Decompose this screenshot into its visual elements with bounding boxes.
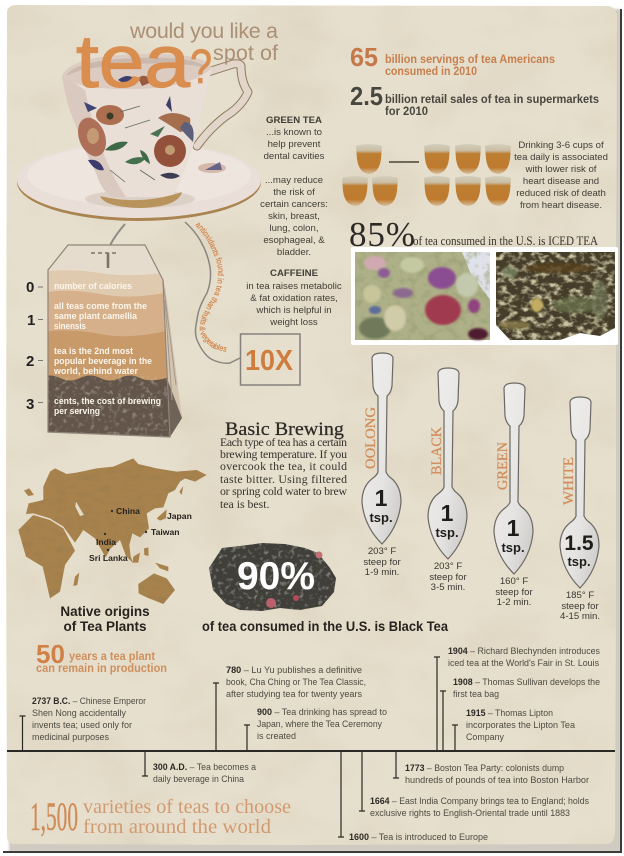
photo: floral tea <box>355 252 490 340</box>
photos: loose tea leaves <box>351 247 618 345</box>
tea bag scale and facts: per serving <box>54 406 100 417</box>
basic brewing <box>220 419 347 511</box>
event: 780: after studying tea for twenty years <box>226 689 362 700</box>
basic brewing: or spring cold water to brew <box>220 484 347 498</box>
map caption <box>60 604 150 634</box>
10X callout <box>240 334 300 385</box>
event: 1908: 1908 – Thomas Sullivan develops the <box>453 677 600 688</box>
basic brewing: tea is best. <box>220 497 270 511</box>
event: 1908: first tea bag <box>453 689 499 700</box>
heart health text: Drinking 3-6 cups of <box>518 140 604 151</box>
spoon: black: tsp. <box>435 525 459 540</box>
green tea and caffeine facts: lung, colon, <box>269 223 319 234</box>
stat: 2.5 billion retail sales: for 2010 <box>385 106 428 118</box>
heart health text <box>514 140 608 211</box>
event: 780 <box>213 665 366 750</box>
timeline axis <box>7 750 615 752</box>
event: 2737 B.C. <box>20 696 147 750</box>
green tea and caffeine facts: weight loss <box>269 317 318 328</box>
antioxidants string with curved text: antioxidants found in tea than fruits & vegetables <box>196 222 227 352</box>
map caption: Native origins <box>60 604 150 619</box>
timeline <box>7 646 615 843</box>
map labels: Sri Lanka <box>89 553 128 563</box>
stat: 50 years: years a tea plant <box>69 651 155 663</box>
10X callout: 10X <box>245 345 294 377</box>
spoon: green: tsp. <box>501 540 525 555</box>
spoon: oolong <box>362 353 401 578</box>
spoon: oolong: 1 <box>375 485 388 511</box>
green tea and caffeine facts: CAFFEINE <box>270 268 319 279</box>
stat: 1,500 varieties: varieties of teas to choose <box>83 796 291 818</box>
tea bag scale and facts: 2 <box>26 353 34 370</box>
spoon: oolong: steep for <box>363 557 401 568</box>
green tea and caffeine facts: bladder. <box>277 247 311 258</box>
spoon: white: 1.5 <box>564 532 594 555</box>
title: ? <box>190 41 212 94</box>
cup foot <box>100 192 182 208</box>
tea bag scale and facts: same plant camellia <box>54 311 138 322</box>
stat: 50 years: 50 <box>36 639 65 669</box>
spoon: white: tsp. <box>567 554 591 569</box>
cup body <box>62 68 212 197</box>
green tea and caffeine facts: & fat oxidation rates, <box>250 293 338 304</box>
event: 780: book, Cha Ching or The Tea Classic, <box>226 677 366 688</box>
spoon: green <box>494 383 533 608</box>
spoon: white: WHITE <box>561 457 577 505</box>
stat: 85% iced tea: 85% <box>349 215 415 254</box>
floral decoration <box>73 76 194 182</box>
stat: 1,500 varieties: from around the world <box>83 816 271 838</box>
green tea and caffeine facts: ...may reduce <box>265 175 323 186</box>
event: 1915: incorporates the Lipton Tea <box>466 720 576 731</box>
tea bag scale and facts: world, behind water <box>53 366 138 377</box>
map labels: China <box>116 506 140 516</box>
spoon: black: 3-5 min. <box>431 582 465 593</box>
90% black tea stat: of tea consumed in the U.S. is Black Tea <box>202 619 448 634</box>
spoon: black: steep for <box>429 572 467 583</box>
stat: 2.5 billion retail sales <box>350 81 599 118</box>
green tea and caffeine facts: in tea raises metabolic <box>246 281 342 292</box>
tea bag scale and facts: all teas come from the <box>54 301 147 312</box>
event: 1664: 1664 – East India Company brings tea to England; holds <box>370 796 589 807</box>
spoon: white: steep for <box>561 601 599 612</box>
tea bag string <box>108 224 125 255</box>
event: 900: Japan, where the Tea Ceremony <box>257 719 382 730</box>
tea bag scale and facts <box>26 279 161 417</box>
event: 2737 B.C.: invents tea; used only for <box>32 720 133 731</box>
event: 1915: 1915 – Thomas Lipton <box>466 708 553 719</box>
title: would you like a <box>129 19 278 43</box>
spoon: white: 185° F <box>566 590 594 601</box>
basic brewing: brewing temperature. If you <box>220 447 347 461</box>
stat: 2.5 billion retail sales: billion retail sales of tea in supermarkets <box>385 94 599 106</box>
stat: 65 billion servings: billion servings of tea Americans <box>385 54 555 66</box>
heart health text: tea daily is associated <box>514 152 608 163</box>
green tea and caffeine facts: which is helpful in <box>255 305 332 316</box>
green tea and caffeine facts: dental cavities <box>264 151 325 162</box>
title: spot of <box>213 41 278 65</box>
spoon: oolong: 203° F <box>368 546 396 557</box>
spoon: green: 1 <box>507 515 520 541</box>
teacup on saucer <box>17 54 261 221</box>
spoon: black: BLACK <box>429 427 445 475</box>
saucer <box>17 142 261 221</box>
event: 780: 780 – Lu Yu publishes a definitive <box>226 665 362 676</box>
event: 2737 B.C.: Shen Nong accidentally <box>32 708 126 719</box>
event: 2737 B.C.: 2737 B.C. – Chinese Emperor <box>32 696 147 707</box>
tea bag scale and facts: 0 <box>26 279 34 296</box>
heart health text: heart disease and <box>523 176 599 187</box>
green tea and caffeine facts: ...is known to <box>266 127 322 138</box>
spoon: oolong: OOLONG <box>363 407 379 469</box>
heart health text: reduced risk of death <box>516 188 606 199</box>
tea bag scale and facts: tea is the 2nd most <box>54 346 134 357</box>
stat: 65 billion servings <box>350 42 555 78</box>
spoon: black: 1 <box>441 500 454 526</box>
event: 1600: 1600 – Tea is introduced to Europe <box>349 832 488 843</box>
stat: 50 years: can remain in production <box>36 663 167 675</box>
title: tea <box>76 20 191 103</box>
spoon: green: 1-2 min. <box>497 597 531 608</box>
stat: 85% iced tea <box>349 215 598 254</box>
map labels: Taiwan <box>151 527 180 537</box>
event: 1600 <box>338 752 488 843</box>
tea bag scale and facts: popular beverage in the <box>54 356 152 367</box>
stat: 65 billion servings: consumed in 2010 <box>385 66 477 78</box>
tea bag scale and facts: cents, the cost of brewing <box>54 396 161 407</box>
heart health text: from heart disease. <box>520 200 602 211</box>
spoon: black <box>428 368 467 593</box>
basic brewing: Each type of tea has a certain <box>220 435 347 449</box>
antioxidants string with curved text <box>184 222 240 364</box>
tea bag scale and facts: 1 <box>27 312 35 329</box>
event: 300 A.D.: daily beverage in China <box>153 774 245 785</box>
90% black tea stat: 90% <box>237 555 315 598</box>
event: 1773: hundreds of pounds of tea into Boston Harbor <box>405 775 590 786</box>
spoon: oolong: 1-9 min. <box>365 567 399 578</box>
event: 1664 <box>359 752 589 819</box>
map caption: of Tea Plants <box>63 619 147 634</box>
event: 1904: 1904 – Richard Blechynden introduces <box>448 646 600 657</box>
spoon: white: 4-15 min. <box>560 611 600 622</box>
event: 1904 <box>434 646 600 750</box>
event: 900: is created <box>257 731 296 742</box>
stat: 50 years <box>36 639 167 675</box>
basic brewing: Basic Brewing <box>225 419 345 440</box>
event: 300 A.D. <box>142 752 257 785</box>
map labels <box>89 506 192 563</box>
stat: 1,500 varieties <box>30 794 291 839</box>
green tea and caffeine facts: help prevent <box>268 139 321 150</box>
green tea and caffeine facts <box>246 115 342 328</box>
event: 1773 <box>393 752 590 786</box>
stat: 2.5 billion retail sales: 2.5 <box>350 81 383 111</box>
green tea and caffeine facts: GREEN TEA <box>266 115 322 126</box>
green tea and caffeine facts: the risk of <box>273 187 315 198</box>
event: 1773: 1773 – Boston Tea Party: colonists dump <box>405 763 564 774</box>
green tea and caffeine facts: skin, breast, <box>268 211 320 222</box>
tea bag scale and facts: number of calories <box>54 281 132 292</box>
event: 1664: exclusive rights to English-Oriental trade until 1883 <box>370 808 570 819</box>
event: 900: 900 – Tea drinking has spread to <box>257 707 387 718</box>
map labels: Japan <box>167 511 192 521</box>
event: 1908 <box>440 677 600 750</box>
green tea and caffeine facts: certain cancers: <box>260 199 328 210</box>
spoon: white <box>560 397 600 622</box>
spoon: black: 203° F <box>434 561 462 572</box>
heart health text: with lower risk of <box>525 164 597 175</box>
event: 900 <box>244 707 387 750</box>
spoon: oolong: tsp. <box>369 510 393 525</box>
icons: tea glasses <box>342 144 511 206</box>
spoon: green: 160° F <box>500 576 528 587</box>
spoon: green: steep for <box>495 587 533 598</box>
title <box>76 19 278 103</box>
spoon: green: GREEN <box>495 442 511 490</box>
90% black tea stat <box>202 543 448 634</box>
green tea and caffeine facts: esophageal, & <box>263 235 325 246</box>
tea bag scale and facts: 3 <box>26 396 34 413</box>
stat: 65 billion servings: 65 <box>350 42 378 72</box>
tea bag <box>40 245 182 441</box>
event: 1904: iced tea at the World's Fair in St. Louis <box>448 658 599 669</box>
basic brewing: overcook the tea, it could <box>220 459 347 473</box>
stat: 85% iced tea: of tea consumed in the U.S. is ICED TEA <box>413 234 598 248</box>
cup handle <box>197 64 248 146</box>
event: 1915: Company <box>466 732 504 743</box>
world map of tea origins <box>18 458 207 604</box>
tea bag scale and facts: sinensis <box>54 321 86 332</box>
event: 1915 <box>452 708 576 750</box>
stat: 1,500 varieties: 1,500 <box>30 794 78 839</box>
event: 2737 B.C.: medicinal purposes <box>32 732 109 743</box>
basic brewing: taste bitter. Using filtered <box>220 472 347 486</box>
event: 300 A.D.: 300 A.D. – Tea becomes a <box>153 762 257 773</box>
map labels: India <box>96 537 116 547</box>
photo: green tea leaves <box>496 252 615 340</box>
